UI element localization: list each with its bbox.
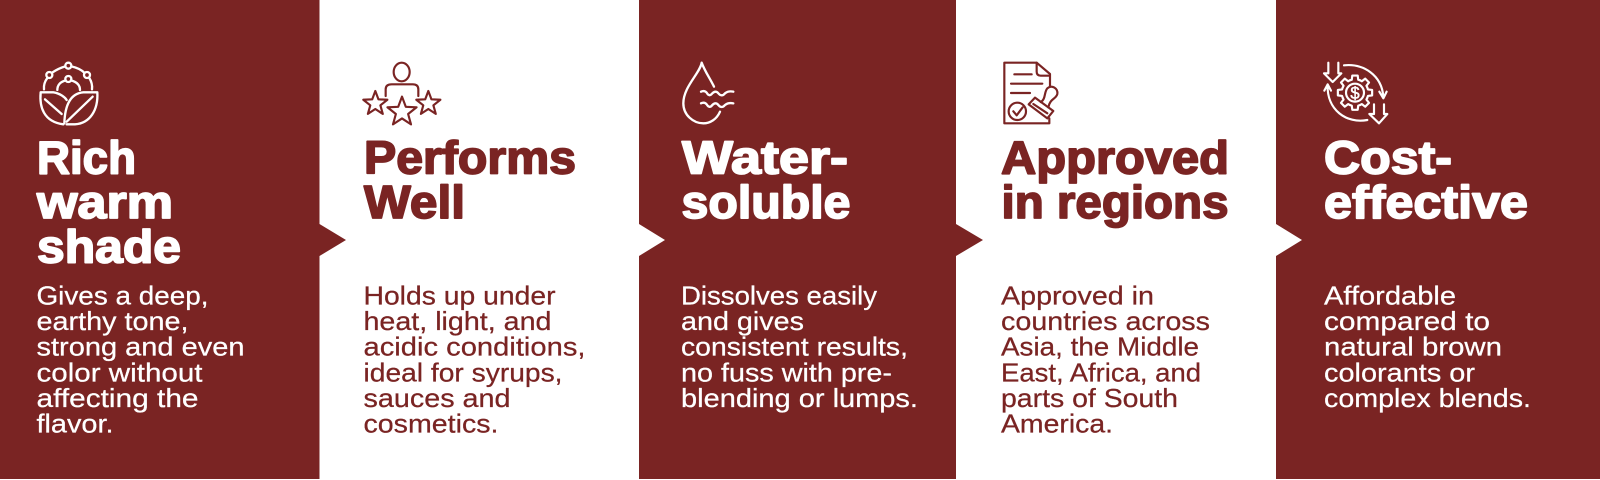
body text: approved in regions: countries across xyxy=(1001,306,1210,336)
heading: Cost-effective xyxy=(1324,132,1528,228)
body text: performs well: heat, light, and xyxy=(364,306,552,336)
body text: water-soluble: and gives xyxy=(681,306,804,336)
body text: rich warm shade: color without xyxy=(36,358,203,388)
body text: performs well xyxy=(364,280,586,438)
body text: rich warm shade: strong and even xyxy=(36,332,244,362)
heading: Approved in regions: Approved xyxy=(1001,132,1229,184)
body text: approved in regions: America. xyxy=(1001,408,1113,438)
heading: Cost-effective: effective xyxy=(1324,176,1528,228)
body text: cost-effective: complex blends. xyxy=(1324,383,1531,413)
panel: performs well xyxy=(363,63,586,439)
panel: approved in regions xyxy=(1001,63,1229,439)
body text: approved in regions xyxy=(1001,280,1210,438)
panel: cost-effective xyxy=(1276,0,1600,479)
body text: water-soluble xyxy=(681,280,918,413)
panel: water-soluble xyxy=(639,0,983,479)
body text: cost-effective: compared to xyxy=(1324,306,1490,336)
body text: water-soluble: blending or lumps. xyxy=(681,383,918,413)
icon: gear with dollar sign and arrows: $ xyxy=(1350,84,1360,103)
heading: Water-soluble xyxy=(682,132,850,228)
body text: cost-effective: natural brown xyxy=(1324,332,1502,362)
icon: gear with dollar sign and arrows xyxy=(1324,63,1387,123)
body text: cost-effective: colorants or xyxy=(1324,358,1475,388)
panel: rich warm shade xyxy=(0,0,346,479)
body text: rich warm shade: earthy tone, xyxy=(36,306,188,336)
icon: water drop with waves xyxy=(683,63,733,123)
body text: rich warm shade: Gives a deep, xyxy=(36,280,208,310)
body text: rich warm shade xyxy=(36,280,244,438)
body text: rich warm shade: affecting the xyxy=(36,383,198,413)
body text: performs well: ideal for syrups, xyxy=(364,358,562,388)
heading: Rich warm shade: warm xyxy=(36,176,173,228)
body text: water-soluble: no fuss with pre- xyxy=(681,358,892,388)
heading: Water-soluble: soluble xyxy=(682,176,850,228)
body text: cost-effective: Affordable xyxy=(1324,280,1456,310)
icon: person with three stars xyxy=(363,63,440,124)
heading: Rich warm shade: Rich xyxy=(37,132,136,184)
icon: document with stamp xyxy=(1004,63,1057,123)
heading: Approved in regions xyxy=(1001,132,1229,228)
heading: Rich warm shade: shade xyxy=(37,220,181,272)
heading: Water-soluble: Water- xyxy=(682,132,848,184)
icon: leaves with network nodes xyxy=(40,63,97,124)
panel background with arrow xyxy=(0,0,346,479)
panel background with notch xyxy=(639,0,983,479)
body text: cost-effective xyxy=(1324,280,1531,413)
body text: water-soluble: Dissolves easily xyxy=(681,280,877,310)
heading: Performs Well: Well xyxy=(364,176,465,228)
body text: approved in regions: Asia, the Middle xyxy=(1001,332,1199,362)
heading: Cost-effective: Cost- xyxy=(1324,132,1452,184)
body text: performs well: cosmetics. xyxy=(364,408,498,438)
body text: performs well: sauces and xyxy=(364,383,510,413)
body text: approved in regions: parts of South xyxy=(1001,383,1178,413)
heading: Performs Well: Performs xyxy=(364,132,576,184)
body text: water-soluble: consistent results, xyxy=(681,332,908,362)
body text: performs well: Holds up under xyxy=(364,280,556,310)
body text: performs well: acidic conditions, xyxy=(364,332,586,362)
panel background with notch xyxy=(1276,0,1600,479)
body text: rich warm shade: flavor. xyxy=(36,408,114,438)
heading: Rich warm shade xyxy=(36,132,181,272)
body text: approved in regions: Approved in xyxy=(1001,280,1154,310)
heading: Approved in regions: in regions xyxy=(1002,176,1228,228)
body text: approved in regions: East, Africa, and xyxy=(1001,358,1201,388)
heading: Performs Well xyxy=(364,132,576,228)
